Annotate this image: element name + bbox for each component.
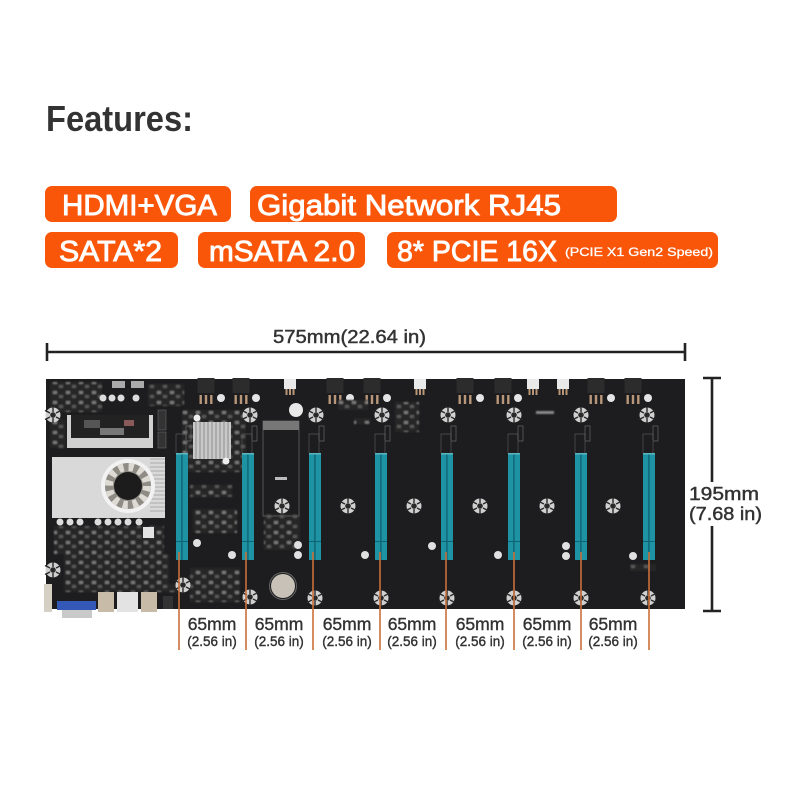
title: Features: <box>46 98 193 139</box>
chipset cooler with fan <box>52 457 165 518</box>
rear IO ports <box>44 584 173 618</box>
spacing label 3 <box>322 614 372 649</box>
spacing label 1 <box>187 614 237 649</box>
spacing label 3: 65mm <box>323 614 371 634</box>
spacing label 5 <box>455 614 505 649</box>
slot capacitors <box>193 539 637 560</box>
spacing label 2 <box>254 614 304 649</box>
spacing label 5: (2.56 in) <box>455 634 505 649</box>
spacing label 4: 65mm <box>388 614 436 634</box>
SODIMM socket <box>67 415 153 448</box>
chip: Gigabit Network RJ45 <box>250 186 617 222</box>
spacing label 6: 65mm <box>523 614 571 634</box>
spacing label 6: (2.56 in) <box>522 634 572 649</box>
motherboard <box>44 378 685 618</box>
circuit clutter <box>50 382 656 602</box>
chip: SATA*2 <box>45 232 178 268</box>
CMOS battery <box>270 572 296 600</box>
top connectors <box>112 378 652 404</box>
chip: Gigabit Network RJ45: Gigabit Network RJ45 <box>257 190 561 222</box>
SATA connectors <box>158 410 166 448</box>
spacing label 4: (2.56 in) <box>387 634 437 649</box>
spacing label 6 <box>522 614 572 649</box>
mounting holes <box>45 407 656 606</box>
PCIe slots <box>176 426 658 560</box>
spacing label 7: 65mm <box>589 614 637 634</box>
spacing label 3: (2.56 in) <box>322 634 372 649</box>
height dimension arrow: 195mm <box>689 484 759 504</box>
mSATA socket <box>263 403 303 516</box>
spacing label 7 <box>588 614 638 649</box>
chip: HDMI+VGA: HDMI+VGA <box>62 190 218 222</box>
spacing label 2: (2.56 in) <box>254 634 304 649</box>
chip: SATA*2: SATA*2 <box>59 236 162 268</box>
height dimension arrow: (7.68 in) <box>689 504 762 524</box>
spacing label 4 <box>387 614 437 649</box>
spacing label 1: (2.56 in) <box>187 634 237 649</box>
feature chips <box>45 186 718 268</box>
spacing label 1: 65mm <box>188 614 236 634</box>
height dimension arrow <box>688 378 764 611</box>
chip: 8* PCIE 16X: 8* PCIE 16X <box>397 236 557 268</box>
spacing label 2: 65mm <box>255 614 303 634</box>
VGA port <box>57 601 96 618</box>
CPU heatsink <box>193 414 231 464</box>
capacitors <box>56 394 154 538</box>
spacing label 7: (2.56 in) <box>588 634 638 649</box>
spacing label 5: 65mm <box>456 614 504 634</box>
spacing labels <box>187 614 638 649</box>
chip: mSATA 2.0: mSATA 2.0 <box>209 236 355 268</box>
width dimension arrow: 575mm(22.64 in) <box>273 327 426 347</box>
chip: 8* PCIE 16X <box>387 232 718 268</box>
chip: 8* PCIE 16X: (PCIE X1 Gen2 Speed) <box>565 245 713 259</box>
width dimension arrow <box>47 327 685 361</box>
spacing marker lines <box>179 552 649 650</box>
